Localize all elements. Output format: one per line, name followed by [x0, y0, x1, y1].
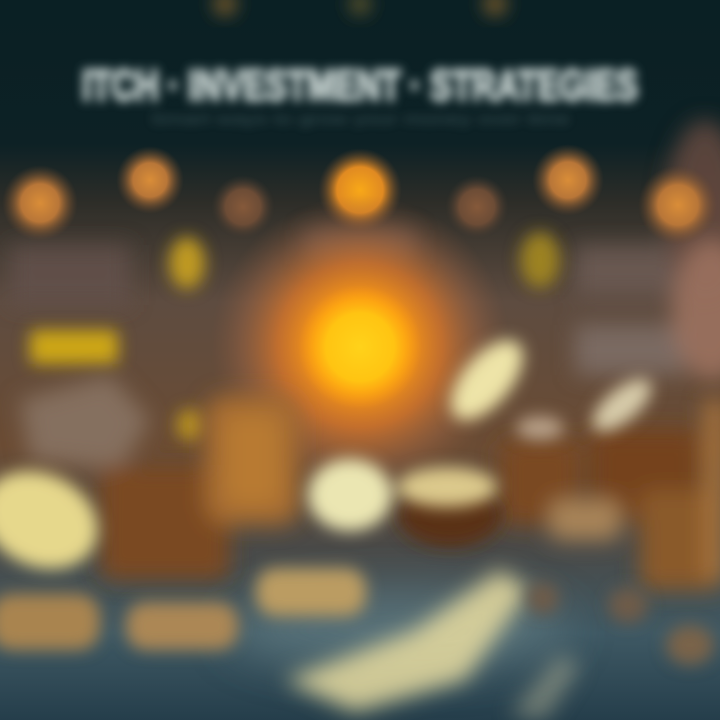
brown coin stacks [20, 375, 720, 590]
yellow accents [30, 232, 560, 441]
row of glowing orbs [2, 144, 718, 245]
light streak [285, 570, 580, 720]
top faint orbs [212, 0, 508, 17]
dark bowl under central coin [398, 483, 502, 547]
pale coins [0, 328, 660, 587]
mid-ground haze panels [10, 120, 720, 380]
subtitle: Smart ways to grow your money over time [150, 111, 570, 128]
flat foreground coins [0, 568, 714, 665]
bottom table surface [230, 590, 570, 670]
central sun [210, 195, 510, 495]
